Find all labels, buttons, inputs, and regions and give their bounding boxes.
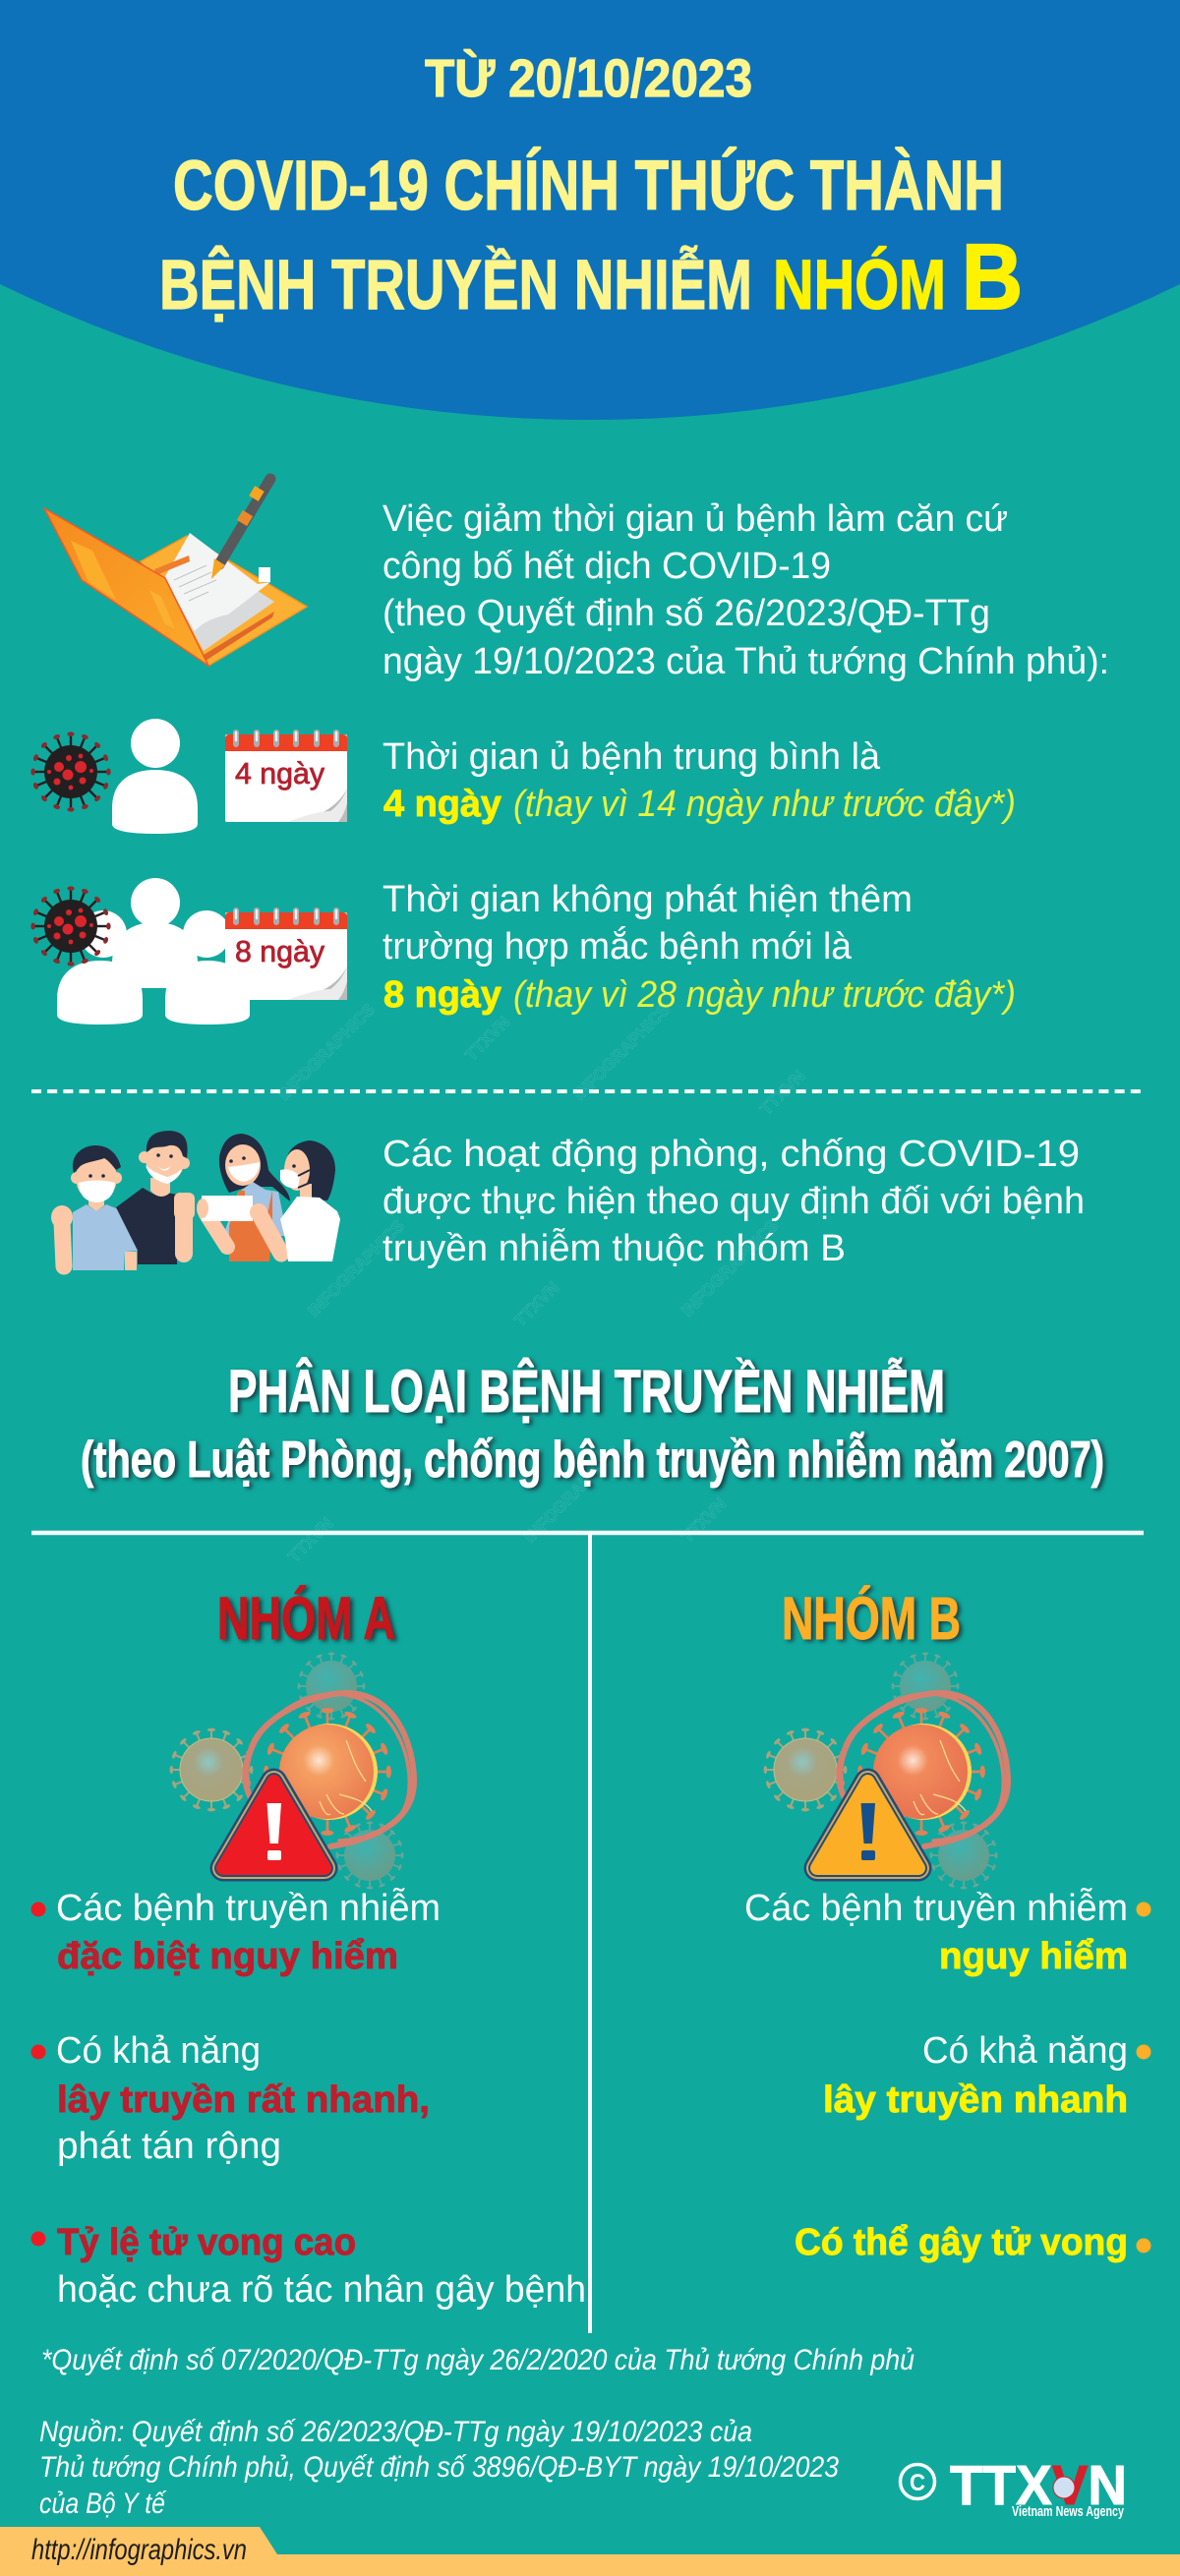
bullet 2 A: lây truyền rất nhanh, xyxy=(57,2079,430,2121)
person 2 xyxy=(116,1131,195,1264)
intro text: (theo Quyết định số 26/2023/QĐ-TTg xyxy=(383,593,990,634)
copyright mark xyxy=(901,2464,934,2499)
intro text: Việc giảm thời gian ủ bệnh làm căn cứ xyxy=(383,498,1008,540)
icon: group of masked people xyxy=(51,1131,340,1270)
icon: calendar 4 days xyxy=(225,732,347,822)
source: của Bộ Y tế xyxy=(39,2488,167,2520)
watermarks: INFOGRAPHICS xyxy=(569,1000,674,1104)
copyright mark: C xyxy=(910,2470,925,2496)
bullet 1 B: nguy hiểm xyxy=(939,1936,1128,1977)
no new cases text: (thay vì 28 ngày như trước đây*) xyxy=(513,974,1016,1016)
bullet 3 A: Tỷ lệ tử vong cao xyxy=(57,2222,356,2263)
bullet 3 A: hoặc chưa rõ tác nhân gây bệnh xyxy=(57,2269,586,2311)
icon: virus cluster B xyxy=(764,1653,1008,1889)
watermarks: TTXVN xyxy=(284,1514,336,1566)
intro text: công bố hết dịch COVID-19 xyxy=(383,546,831,587)
wordmark: TTXVN xyxy=(950,2454,1127,2517)
panel: group A xyxy=(31,1585,586,2311)
bullet 2 A: phát tán rộng xyxy=(57,2126,281,2167)
source: Nguồn: Quyết định số 26/2023/QĐ-TTg ngày 19/10/2023 của xyxy=(39,2416,752,2448)
watermarks: INFOGRAPHICS xyxy=(520,1442,624,1547)
watermarks: TTXVN xyxy=(461,1013,513,1065)
footnote: *Quyết định số 07/2020/QĐ-TTg ngày 26/2/2020 của Thủ tướng Chính phủ xyxy=(41,2344,914,2376)
prevention text: Các hoạt động phòng, chống COVID-19 xyxy=(383,1134,1080,1175)
icon: red warning triangle xyxy=(223,1782,324,1868)
icon: group of people xyxy=(57,878,250,1025)
title: letter B: B xyxy=(962,225,1023,329)
bullet 3 A xyxy=(31,2222,586,2311)
bullet 1 A: đặc biệt nguy hiểm xyxy=(57,1936,398,1977)
no new cases text xyxy=(383,879,1016,1016)
watermarks: TTXVN xyxy=(678,1494,730,1547)
incubation text: Thời gian ủ bệnh trung bình là xyxy=(383,736,881,778)
row: incubation icons xyxy=(30,719,347,834)
icon: virus xyxy=(30,732,111,812)
source xyxy=(39,2416,839,2520)
title: line 3: BỆNH TRUYỀN NHIỄM xyxy=(159,246,752,324)
prevention text: được thực hiện theo quy định đối với bệnh xyxy=(383,1181,1085,1222)
logo: TTXVN xyxy=(901,2454,1127,2520)
icon: calendar 4 days: 4 ngày xyxy=(235,756,324,790)
title block xyxy=(159,49,1023,329)
globe mark xyxy=(1053,2477,1075,2498)
title: date line: TỪ 20/10/2023 xyxy=(425,49,752,108)
footer url: http://infographics.vn xyxy=(31,2534,247,2566)
no new cases text: trường hợp mắc bệnh mới là xyxy=(383,925,853,967)
intro text xyxy=(383,498,1109,682)
icon: virus xyxy=(30,886,111,966)
prevention text xyxy=(383,1134,1085,1269)
bullet 1 B xyxy=(744,1887,1150,1977)
incubation text xyxy=(383,736,1016,825)
icon: amber warning triangle xyxy=(817,1782,918,1868)
watermarks: INFOGRAPHICS xyxy=(304,1216,408,1320)
bullet 1 B: Các bệnh truyền nhiễm xyxy=(744,1887,1128,1929)
person 1 xyxy=(51,1145,141,1270)
footer bar xyxy=(0,2527,1180,2576)
watermarks: TTXVN xyxy=(756,1067,808,1119)
person 3 xyxy=(197,1134,290,1261)
bullet 2 A: Có khả năng xyxy=(56,2030,261,2072)
bullet 2 A xyxy=(31,2030,430,2167)
no new cases text: 8 ngày xyxy=(384,974,502,1016)
header: blue arc xyxy=(0,0,1180,420)
bullet 2 B xyxy=(823,2030,1150,2121)
icon: calendar 8 days: 8 ngày xyxy=(235,934,324,968)
agency name: Vietnam News Agency xyxy=(1012,2503,1124,2520)
heading: nhóm A: NHÓM A xyxy=(217,1585,395,1652)
watermarks xyxy=(274,1000,808,1566)
bullet 3 B: Có thể gây tử vong xyxy=(795,2222,1128,2263)
watermarks: INFOGRAPHICS xyxy=(678,1216,782,1320)
prevention text: truyền nhiễm thuộc nhóm B xyxy=(383,1227,846,1269)
no new cases text: Thời gian không phát hiện thêm xyxy=(383,879,913,920)
icon: person xyxy=(112,719,198,834)
intro text: ngày 19/10/2023 của Thủ tướng Chính phủ): xyxy=(383,641,1109,682)
person 4 xyxy=(280,1141,340,1261)
title: nhóm: NHÓM xyxy=(773,247,946,324)
bullet 2 B: lây truyền nhanh xyxy=(823,2079,1128,2121)
panel: group B xyxy=(744,1585,1150,2263)
watermarks: TTXVN xyxy=(510,1278,562,1330)
bullet 2 B: Có khả năng xyxy=(922,2030,1128,2072)
row: no new cases icons xyxy=(30,878,347,1025)
watermarks: INFOGRAPHICS xyxy=(274,1000,379,1104)
classification heading xyxy=(81,1358,1104,1489)
icon: folder with document and pen xyxy=(44,479,307,666)
icon: calendar 8 days xyxy=(225,910,347,1000)
heading: nhóm B: NHÓM B xyxy=(782,1585,961,1652)
bullet 1 A xyxy=(31,1887,441,1977)
source: Thủ tướng Chính phủ, Quyết định số 3896/QĐ-BYT ngày 19/10/2023 xyxy=(39,2451,839,2484)
icon: virus cluster A xyxy=(170,1653,414,1889)
incubation text: (thay vì 14 ngày như trước đây*) xyxy=(513,784,1016,825)
bullet 1 A: Các bệnh truyền nhiễm xyxy=(56,1887,441,1929)
incubation text: 4 ngày xyxy=(384,784,502,825)
